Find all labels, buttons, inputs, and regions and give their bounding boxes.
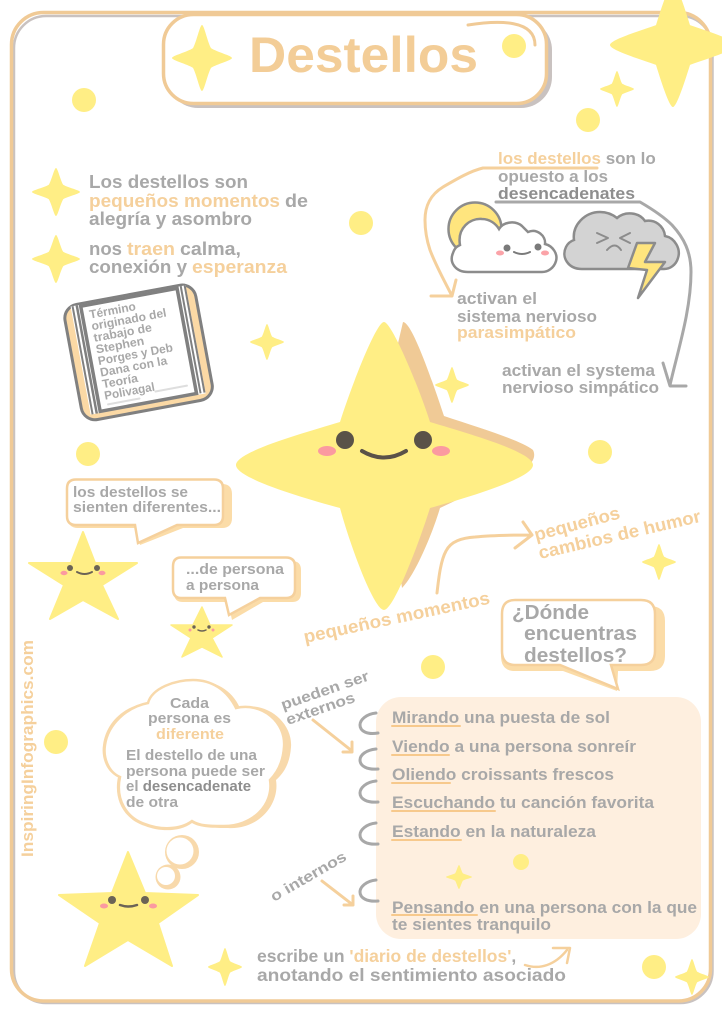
thought text: desencadenate xyxy=(143,778,251,795)
parasympathetic text: activan el xyxy=(457,289,537,308)
speech bubble: donde encuentras destellos xyxy=(501,600,665,691)
icon: bullet star two xyxy=(32,235,80,283)
list item underlines xyxy=(392,726,495,915)
thought text: el xyxy=(126,778,143,795)
speech bubble: donde encuentras destellos: encuentras xyxy=(524,622,637,645)
thought text xyxy=(126,695,265,811)
panel: where to find sparkles list xyxy=(376,697,701,939)
list text: Mirando una puesta de sol xyxy=(392,709,610,727)
notebook rings xyxy=(360,713,378,901)
opposites text: los destellos xyxy=(498,149,601,168)
speech bubble: de persona a persona xyxy=(173,558,301,620)
book text: Stephen xyxy=(95,334,145,356)
definition text xyxy=(89,171,308,229)
list text: Escuchando tu canción favorita xyxy=(392,794,655,812)
list text: Viendo a una persona sonreír xyxy=(392,738,637,756)
thought text: Cada xyxy=(170,695,210,712)
label: o internos: o internos xyxy=(268,848,350,905)
parasympathetic text xyxy=(457,289,597,342)
thought text: diferente xyxy=(156,726,224,743)
label: pueden ser externos xyxy=(279,668,371,729)
speech bubble: los destellos se sienten diferentes: los destellos se xyxy=(73,484,188,501)
book text: Porges y Deb xyxy=(97,340,174,368)
book text: Término xyxy=(88,299,137,322)
corner sparkle xyxy=(675,959,709,995)
arrow: tip accent xyxy=(525,948,570,967)
decorative sparkles xyxy=(208,0,722,986)
list text: Estando en la naturaleza xyxy=(392,823,597,841)
effect text: traen xyxy=(127,238,175,259)
central smiling star xyxy=(236,322,534,610)
effect text: esperanza xyxy=(192,256,288,277)
list text: Pensando en una persona con la que xyxy=(392,899,697,917)
speech bubble: los destellos se sienten diferentes: sienten diferentes... xyxy=(73,499,221,516)
star character one xyxy=(29,532,137,619)
thought bubbles xyxy=(156,835,199,890)
opposites text: opuesto a los xyxy=(498,167,608,186)
label: pequeños momentos: pequeños momentos xyxy=(302,588,492,647)
title: Destellos xyxy=(249,27,478,83)
speech bubble: de persona a persona: ...de persona xyxy=(186,561,285,578)
title accent stroke xyxy=(468,22,535,45)
closing tip text: escribe un xyxy=(257,946,349,966)
arrow: desencadenates to simpatico xyxy=(496,202,691,386)
effect text xyxy=(89,238,288,277)
effect text: nos xyxy=(89,238,122,259)
opposites text: desencadenates xyxy=(498,184,635,203)
book text: trabajo de xyxy=(92,320,153,345)
decorative dots xyxy=(44,34,666,979)
list text xyxy=(392,709,697,934)
sympathetic text: activan el systema xyxy=(502,361,656,380)
label: pequeños cambios de humor: pequeños xyxy=(532,503,622,545)
book text: originado del xyxy=(90,306,168,333)
vertical credit: InspiringInfographics.com xyxy=(18,640,37,857)
label: pequeños cambios de humor: cambios de humor xyxy=(536,506,703,563)
arrow: internos xyxy=(322,881,353,905)
effect text: conexión y xyxy=(89,256,188,277)
label: pueden ser externos: pueden ser xyxy=(279,668,371,714)
intro text block xyxy=(32,168,308,283)
list text: Oliendo croissants frescos xyxy=(392,766,614,784)
sympathetic text: nervioso simpático xyxy=(502,378,659,397)
thought text: persona puede ser xyxy=(126,763,265,780)
thought text: El destello de una xyxy=(126,747,258,764)
speech bubble: donde encuentras destellos: destellos? xyxy=(524,644,627,667)
parasympathetic text: parasimpático xyxy=(457,323,576,342)
sympathetic text xyxy=(502,361,659,397)
list text: te sientes tranquilo xyxy=(392,916,551,934)
star character two xyxy=(171,607,232,657)
thought cloud xyxy=(103,680,291,830)
closing tip text: 'diario de destellos', xyxy=(349,946,516,966)
closing tip text: anotando el sentimiento asociado xyxy=(257,965,566,985)
book text: Teoría xyxy=(101,371,139,391)
definition text: de xyxy=(285,190,308,211)
arrow: externos xyxy=(313,720,352,752)
title banner xyxy=(164,14,552,108)
arrow: destellos to parasimpatico xyxy=(425,168,597,296)
panel dot and sparkle xyxy=(446,854,529,889)
book text: Polivagal xyxy=(103,380,156,403)
definition text: alegría y asombro xyxy=(89,208,252,229)
icon: title star xyxy=(172,25,232,91)
definition text: Los destellos son xyxy=(89,171,248,192)
thought text: de otra xyxy=(126,794,179,811)
speech bubble: de persona a persona: a persona xyxy=(186,577,260,594)
definition text: pequeños momentos xyxy=(89,190,280,211)
icon: bullet star one xyxy=(32,168,80,216)
parasympathetic text: sistema nervioso xyxy=(457,307,597,326)
effect text: calma, xyxy=(180,238,241,259)
icon: angry storm cloud xyxy=(564,212,679,298)
speech bubble: los destellos se sienten diferentes xyxy=(67,480,232,545)
opposites text: son lo xyxy=(601,149,656,168)
book text: Dana con la xyxy=(99,353,169,380)
icon: happy cloud with moon xyxy=(448,202,556,272)
label: pueden ser externos: externos xyxy=(284,689,357,729)
book text xyxy=(88,294,180,403)
opposites text xyxy=(498,149,656,203)
closing tip text xyxy=(257,946,566,985)
star character three xyxy=(59,852,198,966)
book note xyxy=(63,283,215,422)
arrow: to cambios de humor xyxy=(437,522,532,593)
speech bubble: donde encuentras destellos: ¿Dónde xyxy=(512,601,589,624)
thought text: persona es xyxy=(148,710,231,727)
